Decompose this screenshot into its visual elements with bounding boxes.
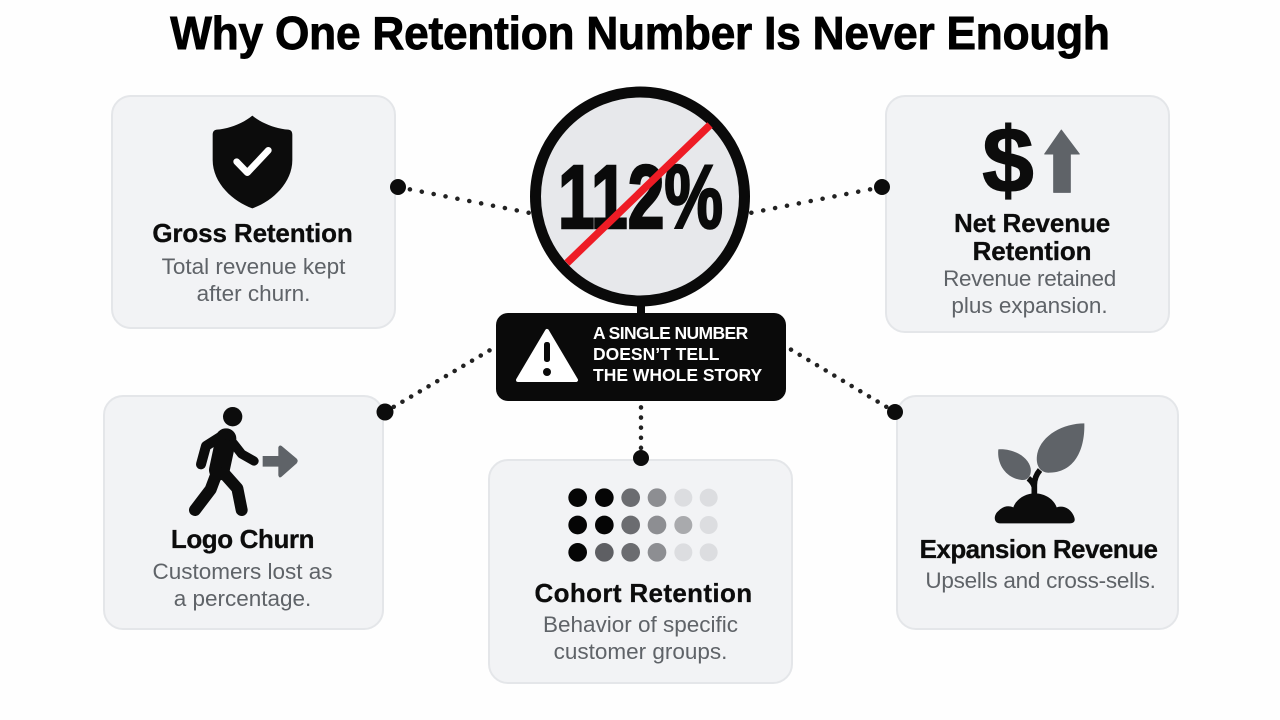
icon: warning triangle (516, 328, 578, 382)
heading: Logo Churn (171, 524, 314, 554)
icon: crossed-out 112%: 112% (558, 148, 723, 248)
icon: dollar and arrow: $ (982, 108, 1034, 212)
panel: expansion revenue (896, 395, 1179, 630)
panel: cohort retention (488, 459, 793, 684)
description (543, 612, 738, 664)
heading: Gross Retention (152, 218, 353, 248)
heading: Net Revenue (954, 208, 1110, 238)
icon: dollar and arrow (982, 108, 1080, 212)
description: plus expansion. (951, 292, 1108, 318)
description: Total revenue kept (162, 254, 345, 279)
description: Revenue retained (943, 266, 1116, 291)
description: Customers lost as (152, 559, 333, 584)
panel: net revenue retention (885, 95, 1170, 333)
callout: warning (496, 313, 786, 401)
description: Behavior of specific (543, 612, 738, 637)
panel: logo churn (103, 395, 384, 630)
heading: Cohort Retention (535, 578, 752, 608)
description: Upsells and cross-sells. (925, 568, 1156, 593)
callout text (593, 323, 762, 385)
heading (954, 208, 1110, 266)
description: after churn. (197, 280, 310, 306)
icon: shield (212, 116, 292, 208)
panel: gross retention (111, 95, 396, 329)
heading: Retention (973, 236, 1091, 266)
callout text: DOESN’T TELL (593, 344, 719, 364)
heading: Expansion Revenue (920, 534, 1157, 564)
description: a percentage. (174, 586, 311, 610)
description: customer groups. (554, 638, 727, 664)
icon: cohort dot grid (568, 488, 718, 562)
icon: sprout (994, 423, 1084, 524)
callout text: A SINGLE NUMBER (593, 323, 748, 343)
description (152, 559, 333, 610)
description (162, 254, 346, 306)
callout text: THE WHOLE STORY (593, 365, 762, 385)
title: Why One Retention Number Is Never Enough (170, 7, 1110, 59)
description (943, 266, 1116, 318)
icon: walking person with arrow (189, 407, 298, 516)
